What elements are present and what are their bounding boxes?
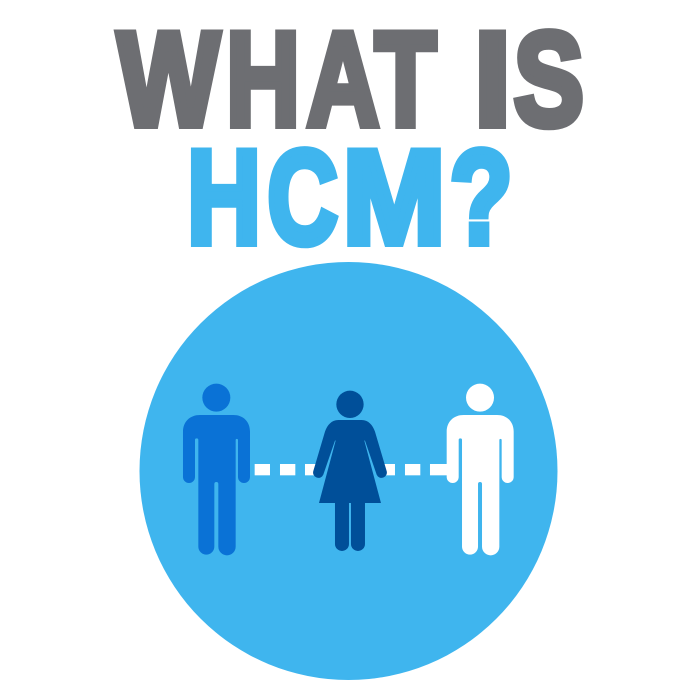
- title line: WHAT IS: H: [226, 6, 300, 154]
- title line: WHAT IS: S: [514, 6, 584, 154]
- icon: blue man: [183, 384, 250, 555]
- icon: navy woman: [313, 391, 387, 551]
- title line: WHAT IS: W: [118, 6, 220, 154]
- title line: HCM?: M: [343, 124, 445, 272]
- icon: white man: [447, 384, 514, 555]
- circle background: [140, 262, 558, 680]
- title line: WHAT IS: [118, 6, 584, 154]
- title line: WHAT IS: A: [307, 6, 379, 154]
- title line: WHAT IS: T: [375, 6, 436, 154]
- title line: HCM?: [187, 124, 512, 272]
- title line: WHAT IS: I: [474, 6, 511, 154]
- title line: HCM?: ?: [450, 124, 512, 272]
- title line: HCM?: H: [187, 124, 261, 272]
- dashed connector between figures: [255, 464, 448, 475]
- title line: HCM?: C: [268, 124, 338, 272]
